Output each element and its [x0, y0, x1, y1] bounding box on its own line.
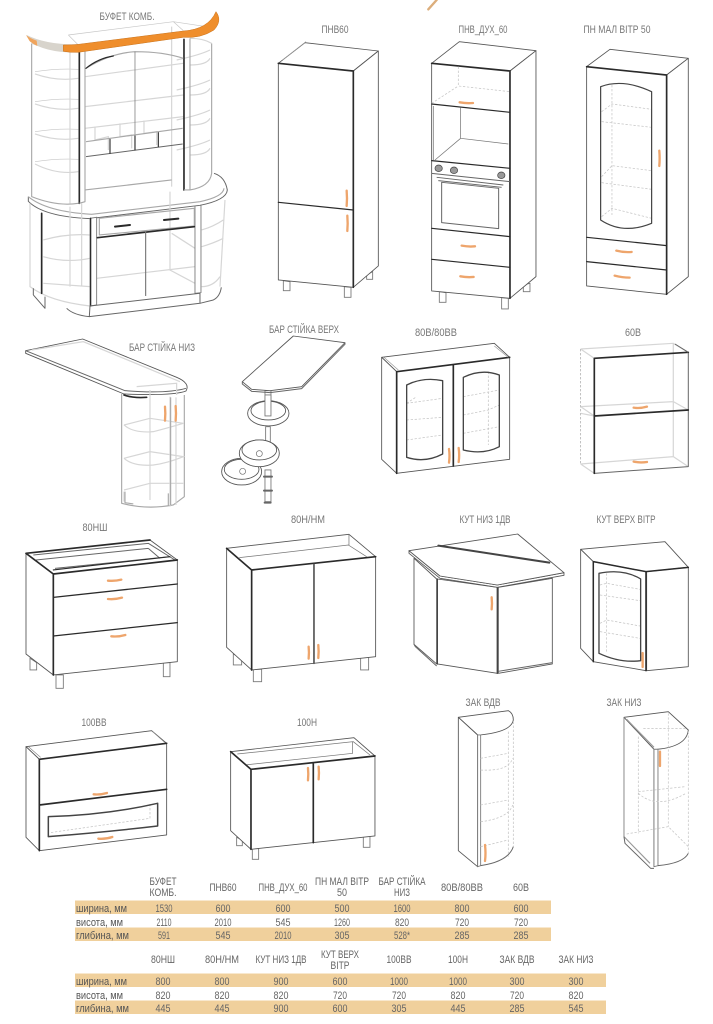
row: depth: 2010 — [274, 930, 292, 942]
table header: ПНВ_ДУХ_60 — [258, 882, 308, 894]
label: КУТ ВЕРХ ВІТР: КУТ ВЕРХ ВІТР — [596, 514, 656, 526]
table header: ПНВ60 — [210, 882, 236, 894]
panel: 100Н — [231, 717, 375, 859]
illustration: tall two-door cabinet — [278, 42, 378, 297]
table header: ВІТР — [330, 960, 350, 972]
label: 80Н/НМ: 80Н/НМ — [291, 514, 325, 526]
row: height: 820 — [568, 990, 584, 1002]
illustration: bar counter with curved base — [26, 339, 187, 507]
row: height: 720 — [455, 917, 469, 929]
table header: 100ВВ — [386, 954, 412, 966]
row: width: 300 — [510, 976, 524, 988]
table header: 100Н — [448, 954, 468, 966]
label: БАР СТІЙКА ВЕРХ: БАР СТІЙКА ВЕРХ — [269, 323, 339, 336]
table header — [150, 875, 529, 899]
row: width: 1000 — [449, 976, 467, 988]
row: depth — [76, 930, 528, 942]
panel: ПНВ_ДУХ_60 — [432, 24, 536, 309]
row: height: 820 — [450, 990, 466, 1002]
row: height: 820 — [214, 990, 230, 1002]
row: width — [76, 903, 528, 915]
panel: 80Н/НМ — [227, 514, 376, 682]
label: buffet: БУФЕТ КОМБ. — [100, 11, 154, 23]
illustration: three-drawer base cabinet — [26, 540, 177, 688]
table bands — [75, 900, 551, 941]
table header: КОМБ. — [150, 887, 176, 899]
row: width: 300 — [568, 976, 584, 988]
illustration: tall glass cabinet — [587, 49, 688, 294]
row: depth: 305 — [392, 1003, 406, 1015]
illustration: curved end wall cabinet — [458, 711, 513, 867]
illustration: corner base cabinet — [409, 534, 564, 673]
panel: КУТ НИЗ 1ДВ — [409, 514, 564, 673]
label: ПНВ60: ПНВ60 — [322, 24, 348, 36]
illustration: curved end base cabinet — [624, 712, 688, 868]
panel: ЗАК ВДВ — [458, 697, 513, 867]
row: height: 820 — [395, 917, 409, 929]
table header: 80НШ — [151, 954, 175, 966]
row: height: 720 — [333, 990, 347, 1002]
table header: 60В — [513, 882, 529, 894]
row: width: 900 — [274, 976, 288, 988]
row: width: 800 — [156, 976, 170, 988]
row: height: 1260 — [334, 917, 350, 929]
label: КУТ НИЗ 1ДВ: КУТ НИЗ 1ДВ — [460, 514, 510, 526]
table header: 50 — [337, 887, 347, 899]
panel: buffet combined — [26, 11, 227, 317]
illustration detail: middle tray — [239, 440, 279, 467]
panel: ПН МАЛ ВІТР 50 — [584, 24, 688, 294]
panel: bar counter lower — [26, 339, 195, 507]
table header: НИЗ — [394, 887, 410, 899]
table header: ПН МАЛ ВІТР — [315, 876, 369, 888]
illustration: tall oven cabinet — [432, 42, 536, 309]
row: height: 820 — [156, 990, 170, 1002]
label: БАР СТІЙКА НИЗ: БАР СТІЙКА НИЗ — [129, 341, 195, 354]
label: 60В: 60В — [625, 327, 641, 339]
table header: 80Н/НМ — [205, 954, 239, 966]
row: depth: 591 — [158, 930, 170, 942]
stray handle fragment at top edge — [428, 0, 437, 9]
row: height: 2110 — [156, 917, 172, 929]
label: 80НШ: 80НШ — [82, 522, 108, 534]
row: depth: 545 — [568, 1003, 584, 1015]
row: width: 800 — [214, 976, 230, 988]
illustration: corner wall glass cabinet — [581, 542, 688, 671]
row: depth: 305 — [334, 930, 350, 942]
row: width: 600 — [332, 976, 348, 988]
row: depth: 528* — [394, 930, 411, 942]
row: height — [76, 917, 528, 929]
row: depth: 445 — [156, 1003, 170, 1015]
label: ЗАК ВДВ: ЗАК ВДВ — [466, 697, 500, 709]
panel: КУТ ВЕРХ ВІТР — [581, 514, 688, 671]
row: width: 500 — [334, 903, 350, 915]
label: ПН МАЛ ВІТР 50: ПН МАЛ ВІТР 50 — [584, 24, 650, 36]
row: width: 600 — [216, 903, 230, 915]
row: width: 1600 — [394, 903, 410, 915]
row: depth: 285 — [514, 930, 528, 942]
table header: КУТ НИЗ 1ДВ — [256, 954, 306, 966]
table header: КУТ ВЕРХ — [321, 949, 359, 961]
row: width: 800 — [454, 903, 470, 915]
row: width: 600 — [514, 903, 528, 915]
row: width: ширина, мм — [76, 976, 127, 988]
table: dimensions, second row set — [75, 949, 606, 1015]
table header: БУФЕТ — [150, 876, 177, 888]
label: 100Н: 100Н — [297, 717, 317, 729]
row: height: 2010 — [214, 917, 232, 929]
panel: 100ВВ — [26, 717, 167, 851]
table: dimensions, first row set — [75, 875, 551, 942]
panel: 80НШ — [26, 522, 177, 688]
row: width: ширина, мм — [76, 903, 127, 915]
row: height: висота, мм — [76, 917, 123, 929]
table header: ЗАК ВДВ — [500, 954, 534, 966]
label: 80В/80ВВ: 80В/80ВВ — [415, 327, 457, 339]
row: width: 1530 — [156, 903, 172, 915]
row: width: 600 — [276, 903, 290, 915]
row: depth: 445 — [214, 1003, 230, 1015]
row: depth — [76, 1003, 584, 1015]
row: height — [76, 990, 584, 1002]
row: height: висота, мм — [76, 990, 123, 1002]
panel: 80В/80ВВ — [382, 327, 510, 473]
row: height: 720 — [392, 990, 406, 1002]
label: ПНВ_ДУХ_60: ПНВ_ДУХ_60 — [458, 24, 508, 36]
row: height: 820 — [274, 990, 288, 1002]
row: height: 545 — [276, 917, 290, 929]
label: ЗАК НИЗ: ЗАК НИЗ — [606, 697, 642, 709]
row: depth: глибина, мм — [76, 930, 129, 942]
panel: bar counter upper — [222, 323, 345, 503]
table header — [151, 949, 594, 972]
table header: ЗАК НИЗ — [558, 954, 594, 966]
illustration detail: upper tray — [248, 395, 289, 426]
illustration: wall cabinet with two glass doors — [382, 343, 510, 473]
illustration detail: lower tray — [222, 458, 262, 485]
panel: 60В — [581, 327, 688, 473]
panel: ЗАК НИЗ — [606, 697, 688, 868]
row: height: 720 — [510, 990, 524, 1002]
row: depth: 545 — [216, 930, 230, 942]
row: depth: 445 — [450, 1003, 466, 1015]
row: depth: 900 — [274, 1003, 288, 1015]
row: depth: 285 — [454, 930, 470, 942]
illustration: two-door base cabinet — [227, 534, 376, 682]
row: width — [76, 976, 584, 988]
table bands — [75, 974, 606, 1014]
illustration: wide two-door base cabinet — [231, 738, 375, 859]
panel: ПНВ60 — [278, 24, 378, 297]
illustration: bar top with pole and round trays — [222, 336, 345, 503]
illustration: wall cabinet with lift doors — [581, 343, 688, 473]
table header: 80В/80ВВ — [441, 882, 483, 894]
label: 100ВВ: 100ВВ — [82, 717, 106, 729]
row: width: 1000 — [390, 976, 408, 988]
row: depth: 600 — [332, 1003, 348, 1015]
table header: БАР СТІЙКА — [378, 875, 426, 888]
illustration: buffet cabinet — [26, 12, 227, 317]
row: height: 720 — [514, 917, 528, 929]
row: depth: 285 — [510, 1003, 524, 1015]
row: depth: глибина, мм — [76, 1003, 129, 1015]
illustration: wide wall cabinet with lift doors — [26, 731, 167, 851]
